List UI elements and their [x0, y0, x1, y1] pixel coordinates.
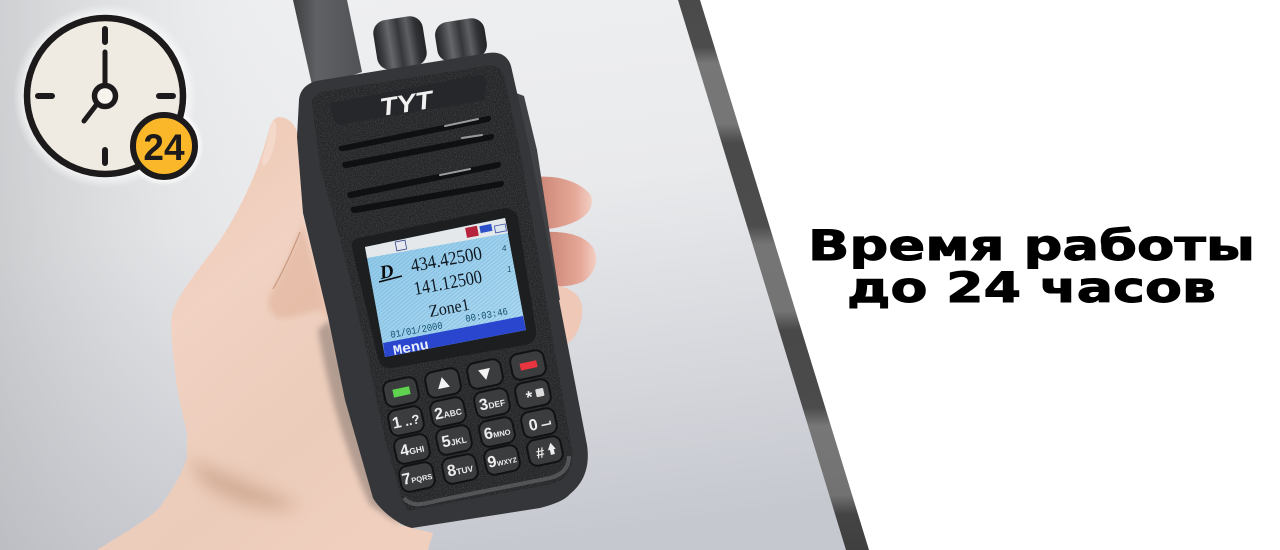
key: 9: 9WXYZ: [486, 449, 519, 472]
key: 6: 6MNO: [482, 421, 512, 444]
key: 4: [393, 433, 431, 465]
tick marks: [38, 29, 173, 163]
key: 2: 2ABC: [433, 401, 463, 424]
textured lower highlight: [404, 456, 569, 504]
LCD hatch: [365, 218, 526, 357]
badge: [133, 115, 195, 177]
clock hands: [84, 52, 105, 121]
palm and thumb: [97, 117, 433, 550]
key: up: [424, 367, 462, 399]
key: 1: [387, 405, 425, 437]
key: 6: [478, 416, 516, 448]
key: 7: 7PQRS: [401, 466, 434, 489]
speaker slot 4: [351, 181, 504, 213]
diagonal striped band: [678, 0, 869, 550]
logo plate: [330, 75, 486, 125]
key: 5: [435, 424, 473, 456]
speaker highlights: [440, 119, 482, 175]
status icons: [395, 224, 506, 251]
channel knob: [433, 16, 489, 64]
LCD digital mode glyph: D: [377, 261, 396, 284]
LCD glyph underline: [379, 276, 402, 282]
heading line 1: Время работы: [808, 221, 1255, 270]
screen bezel: [352, 208, 536, 368]
key: hash: [526, 435, 564, 467]
key: 8: [441, 453, 479, 485]
LCD text: frequency A: 434.42500: [409, 243, 484, 277]
key: end: [509, 349, 547, 381]
LCD text: frequency B: 141.12500: [412, 267, 484, 300]
thumb crease line: [273, 232, 300, 289]
menu bar: [383, 316, 526, 357]
key: 0: [520, 407, 558, 439]
status bar: [365, 218, 508, 258]
wrist shadow: [188, 458, 300, 509]
key: 3: [473, 387, 511, 419]
LCD blue area: [365, 218, 526, 357]
hand holding the radio: [97, 117, 596, 550]
key: star: [514, 378, 552, 410]
fingers: [535, 177, 596, 345]
key: 0: 0: [527, 416, 540, 435]
white glow: [13, 4, 197, 188]
speaker slot 1: [339, 116, 491, 151]
key: call: [382, 376, 420, 408]
white right panel: [700, 0, 1280, 550]
key: 5: 5JKL: [440, 430, 468, 451]
left shading: [0, 0, 860, 550]
speaker slot 2: [342, 134, 494, 168]
panel texture: [312, 65, 572, 510]
radio body: [297, 53, 588, 528]
LCD text: time: 00:03:46: [465, 307, 509, 326]
key: 3: 3DEF: [478, 392, 507, 414]
side bump: [508, 90, 560, 300]
key: star: *: [524, 387, 535, 407]
thumb crease: [268, 215, 330, 320]
key: down: [466, 358, 504, 390]
key: hash: #: [535, 444, 547, 463]
LCD text: date: 01/01/2000: [390, 320, 444, 342]
background gradient panel: [0, 0, 860, 550]
antenna: [293, 0, 362, 85]
LCD screen: [365, 218, 526, 360]
heading: [808, 221, 1255, 312]
clock icon with 24 badge: [13, 4, 204, 188]
keypad: [382, 349, 564, 493]
key: 7: [398, 461, 436, 493]
volume knob: [371, 14, 429, 72]
LCD text: zone: Zone1: [427, 295, 471, 321]
key: 2: [429, 396, 467, 428]
LCD right-hand marker 4: 4: [502, 244, 507, 253]
outer shell: [297, 53, 588, 528]
speaker slot 3: [347, 162, 501, 198]
thumb nail highlight: [262, 121, 276, 165]
LCD text: menu: Menu: [392, 338, 430, 360]
key: 9: [483, 444, 521, 476]
key: 4: 4GHI: [399, 439, 426, 460]
key: 8: 8TUV: [446, 458, 475, 480]
front inner panel: [312, 65, 572, 510]
clock face: [27, 18, 183, 174]
LCD right-hand marker 1: 1: [507, 265, 512, 274]
badge number: 24: [143, 127, 185, 168]
key: 1: 1 ..?: [391, 410, 421, 433]
clock glow near badge: [124, 106, 204, 186]
TYT logo: TYT: [378, 86, 438, 122]
palm shadow next to radio: [318, 320, 400, 525]
heading line 2: до 24 часов: [847, 263, 1216, 312]
clock hub: [94, 86, 116, 106]
